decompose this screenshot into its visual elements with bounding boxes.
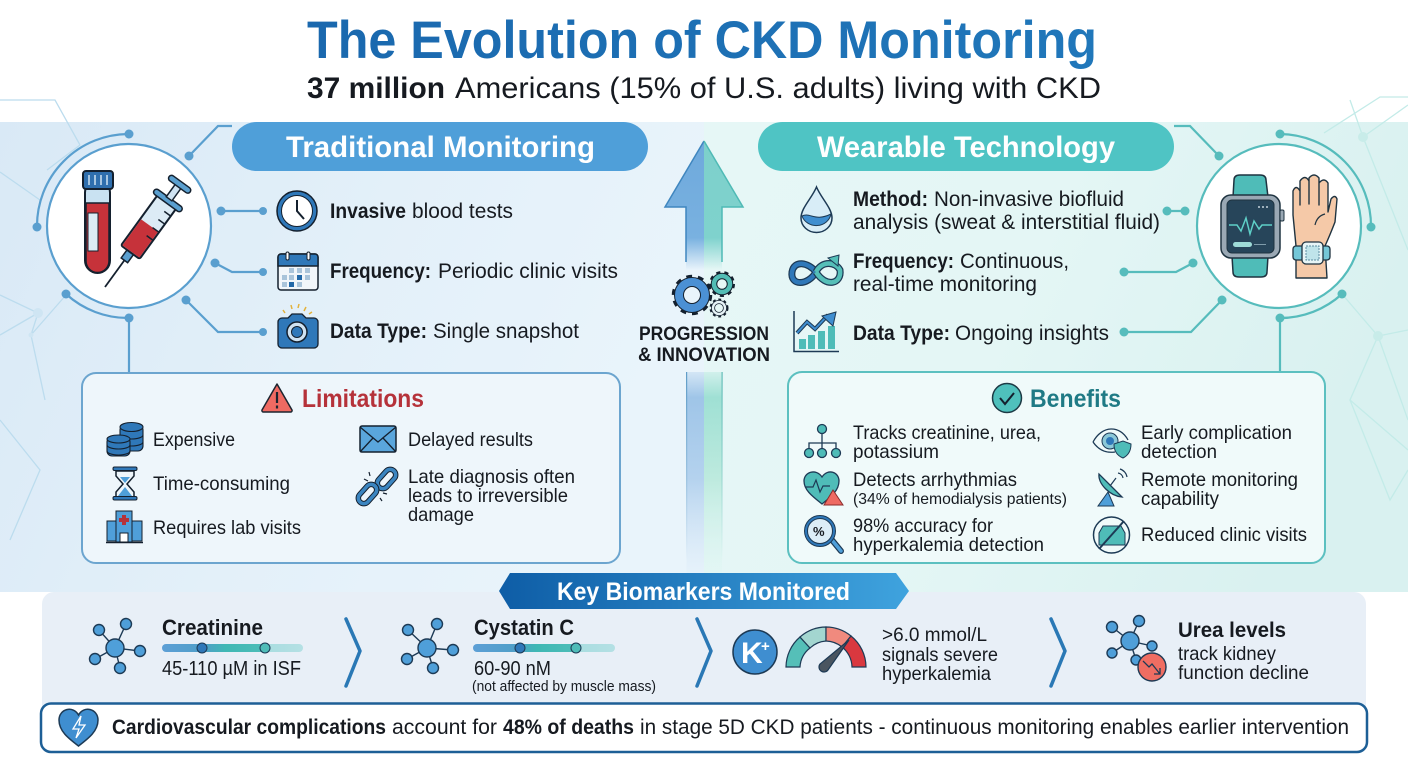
- label: progression and innovation: PROGRESSION: [639, 323, 769, 345]
- biomarker: creatinine: [90, 615, 303, 680]
- subtitle: Americans (15% of U.S. adults) living with CKD: [455, 72, 1101, 105]
- callout: cardiovascular complications: Cardiovascular complications: [112, 716, 386, 739]
- item: time-consuming: [113, 467, 290, 500]
- item: delayed results: Delayed results: [408, 429, 533, 451]
- item: frequency: Continuous,: [960, 249, 1069, 273]
- item: frequency: [330, 259, 618, 283]
- icon: trend chart: [794, 311, 839, 352]
- item: data type: Data Type:: [330, 319, 427, 343]
- icon: calendar: [278, 252, 318, 290]
- panel: traditional monitoring: [32, 122, 648, 372]
- panel: benefits: [788, 372, 1325, 563]
- icon: gears: [676, 274, 732, 316]
- item: tracks creatinine: Tracks creatinine, urea,: [853, 422, 1041, 444]
- title: The Evolution of CKD Monitoring: [307, 11, 1097, 70]
- item: remote monitoring: [1098, 469, 1298, 510]
- icon: molecule: [402, 618, 458, 674]
- label: progression and innovation: & INNOVATION: [638, 344, 770, 366]
- item: delayed results: [360, 426, 533, 452]
- biomarker: urea: function decline: [1178, 662, 1309, 684]
- biomarker: creatinine: 45-110 µM in ISF: [162, 658, 301, 680]
- item: tracks creatinine: [804, 422, 1041, 463]
- subtitle: 37 million: [307, 72, 445, 105]
- item: reduced clinic visits: [1094, 517, 1307, 553]
- item: detects arrhythmias: (34% of hemodialysis patients): [853, 491, 1067, 508]
- icon: potassium ion: [733, 630, 777, 674]
- heading: benefits: [992, 384, 1121, 413]
- heading pill: traditional monitoring: Traditional Monitoring: [286, 131, 595, 164]
- panel: key biomarkers: [42, 573, 1366, 735]
- item: expensive: Expensive: [153, 429, 235, 451]
- item: invasive blood tests: blood tests: [412, 199, 513, 223]
- biomarker: cystatin c: [402, 615, 656, 695]
- heading: limitations: Limitations: [302, 385, 424, 413]
- item: hyperkalemia accuracy: %: [813, 524, 825, 539]
- callout: cardiovascular complications: account for: [392, 716, 497, 739]
- biomarker: potassium: hyperkalemia: [882, 663, 991, 685]
- heading pill: wearable technology: [758, 122, 1174, 171]
- biomarker: potassium: >6.0 mmol/L: [882, 624, 987, 646]
- icon: molecule with decline: [1106, 616, 1166, 681]
- icon: infinity loop: [792, 255, 840, 282]
- icon: test tube and syringe: [47, 144, 211, 308]
- label: progression and innovation: [638, 323, 770, 366]
- icon: molecule: [90, 618, 146, 674]
- item: frequency: [853, 249, 1069, 296]
- item: frequency: Frequency:: [330, 259, 431, 283]
- item: remote monitoring: capability: [1141, 488, 1219, 510]
- callout: cardiovascular complications: 48% of deaths: [503, 716, 634, 739]
- item: requires lab visits: [106, 511, 301, 542]
- item: frequency: Periodic clinic visits: [438, 259, 618, 283]
- icon: camera: [278, 304, 318, 348]
- item: method: analysis (sweat & interstitial fluid): [853, 210, 1160, 234]
- callout: cardiovascular complications: in stage 5D CKD patients - continuous monitoring enables earlier intervention: [640, 716, 1349, 739]
- icon: heart with bolt: [59, 709, 98, 746]
- biomarker: urea: [1106, 616, 1309, 684]
- biomarker: potassium: [733, 624, 998, 685]
- heading: benefits: Benefits: [1030, 385, 1121, 413]
- icon: clock: [277, 191, 317, 231]
- biomarker: cystatin c: (not affected by muscle mass): [472, 679, 656, 695]
- item: detects arrhythmias: Detects arrhythmias: [853, 469, 1017, 491]
- biomarker: urea: track kidney: [1178, 643, 1276, 665]
- item: data type: Ongoing insights: [955, 321, 1109, 345]
- biomarker: potassium: signals severe: [882, 644, 998, 666]
- item: data type: [330, 319, 579, 343]
- heading pill: traditional monitoring: [232, 122, 648, 171]
- item: late diagnosis: [356, 466, 575, 526]
- item: tracks creatinine: potassium: [853, 441, 939, 463]
- biomarker: cystatin c: 60-90 nM: [474, 658, 551, 680]
- callout: cardiovascular complications: [41, 704, 1367, 752]
- item: data type: Single snapshot: [433, 319, 579, 343]
- item: reduced clinic visits: Reduced clinic visits: [1141, 524, 1307, 546]
- right panel background: [704, 122, 1408, 592]
- item: early complication detection: Early complication: [1141, 422, 1292, 444]
- item: expensive: [107, 422, 235, 456]
- item: early complication detection: [1093, 422, 1292, 463]
- item: frequency: Frequency:: [853, 249, 954, 273]
- item: late diagnosis: Late diagnosis often: [408, 466, 575, 488]
- item: method: [853, 187, 1160, 234]
- item: invasive blood tests: Invasive: [330, 199, 406, 223]
- item: hyperkalemia accuracy: 98% accuracy for: [853, 515, 993, 537]
- icon: water drop: [801, 187, 832, 232]
- banner: key biomarkers monitored: [499, 573, 909, 609]
- item: late diagnosis: damage: [408, 504, 474, 526]
- icon: potassium ion: K: [741, 637, 763, 670]
- icon: potassium ion: +: [761, 638, 770, 655]
- item: data type: [853, 321, 1109, 345]
- item: requires lab visits: Requires lab visits: [153, 517, 301, 539]
- banner: key biomarkers monitored: Key Biomarkers Monitored: [557, 578, 850, 606]
- heading pill: wearable technology: Wearable Technology: [817, 131, 1115, 164]
- arrow: progression: [665, 141, 743, 585]
- item: frequency: real-time monitoring: [853, 272, 1037, 296]
- biomarker: cystatin c: Cystatin C: [474, 615, 574, 640]
- biomarker: urea: Urea levels: [1178, 618, 1286, 642]
- item: time-consuming: Time-consuming: [153, 473, 290, 495]
- item: early complication detection: detection: [1141, 441, 1217, 463]
- left panel background: [0, 122, 704, 592]
- item: detects arrhythmias: [804, 469, 1067, 508]
- biomarker: creatinine: Creatinine: [162, 615, 263, 640]
- item: late diagnosis: leads to irreversible: [408, 485, 568, 507]
- item: method: Non-invasive biofluid: [934, 187, 1124, 211]
- item: method: Method:: [853, 187, 928, 211]
- item: remote monitoring: Remote monitoring: [1141, 469, 1298, 491]
- icon: smartwatch and wrist sensor: [1197, 144, 1361, 308]
- item: hyperkalemia accuracy: [806, 515, 1044, 556]
- heading: limitations: [262, 384, 424, 413]
- icon: gauge: [786, 627, 866, 672]
- item: invasive blood tests: [330, 199, 513, 223]
- panel: wearable technology: [758, 122, 1376, 372]
- item: data type: Data Type:: [853, 321, 950, 345]
- panel: limitations: [82, 373, 620, 563]
- item: hyperkalemia accuracy: hyperkalemia detection: [853, 534, 1044, 556]
